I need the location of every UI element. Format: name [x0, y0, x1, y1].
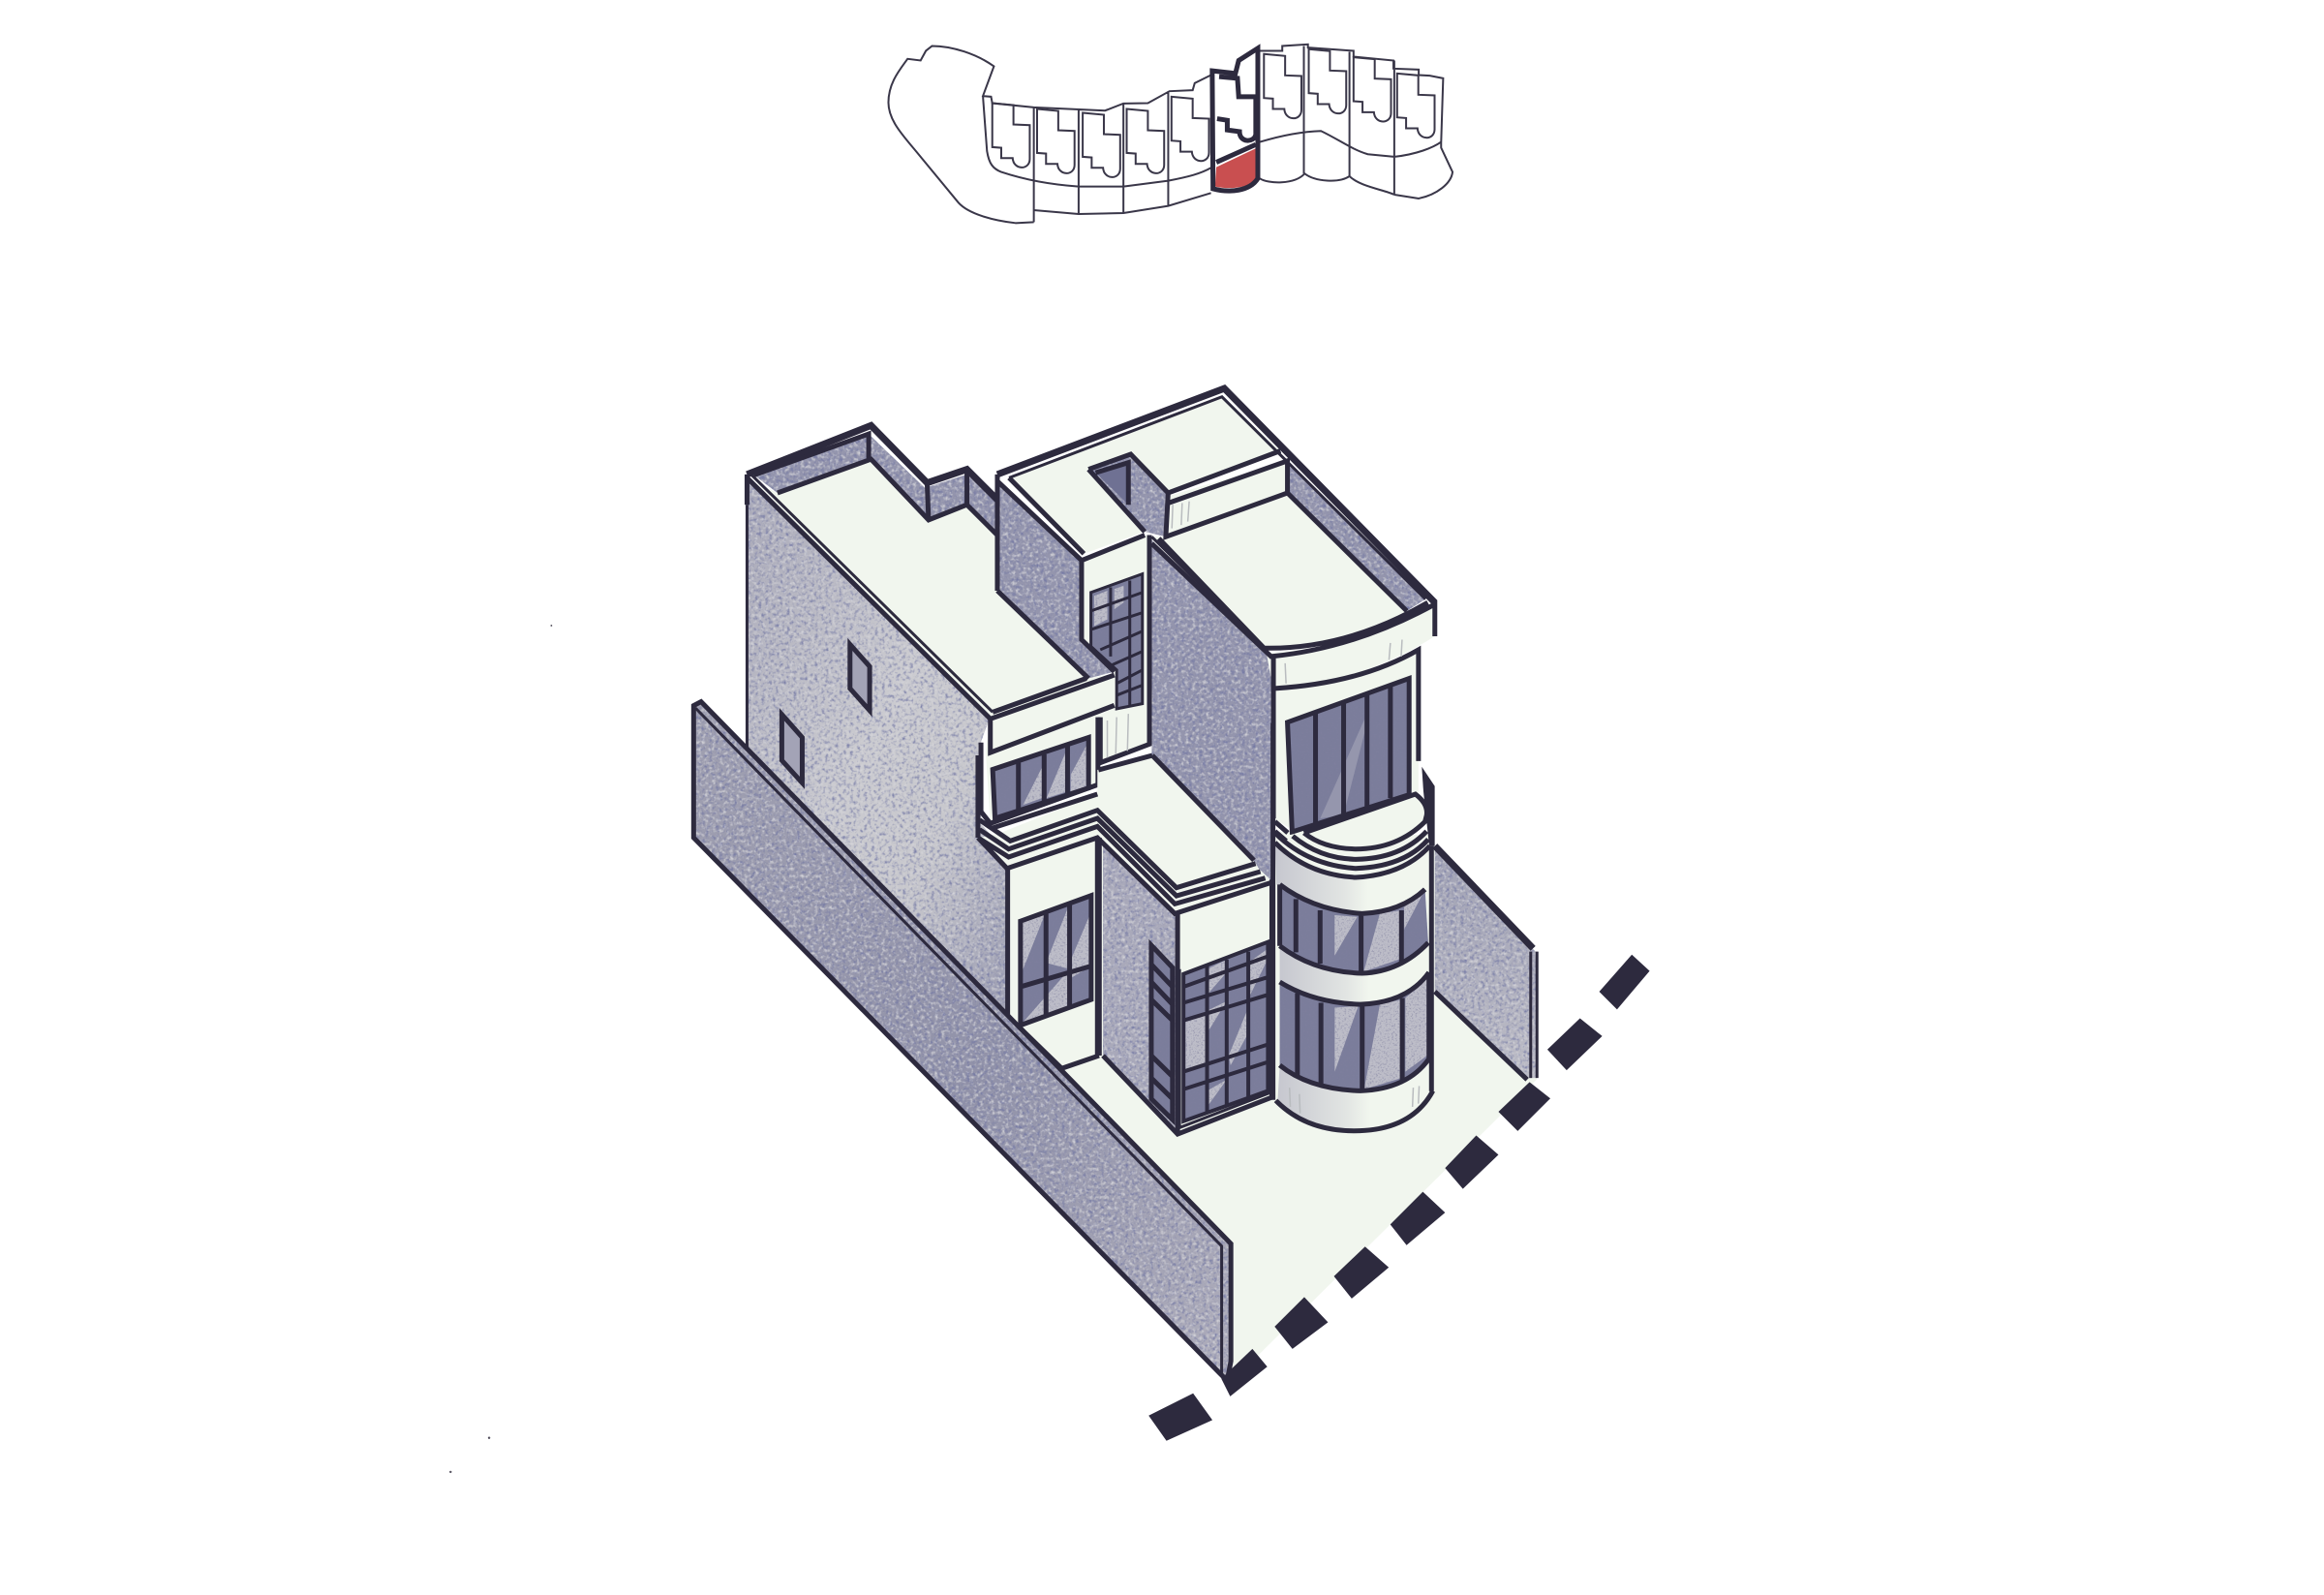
left roof terrace: [756, 459, 1115, 823]
key plan: locator map of the street: [888, 45, 1452, 223]
highlighted plot outline: [1212, 48, 1258, 191]
dark well interior: [1095, 463, 1128, 505]
tower middle band: [1280, 942, 1429, 1004]
right front mint wall: [1177, 879, 1271, 1134]
isometric house illustration: [449, 388, 1650, 1473]
stray specks: [449, 625, 552, 1473]
upper storey linework: [747, 425, 997, 500]
narrow side window: [1151, 945, 1173, 1120]
tower upper glazing: [1280, 884, 1428, 973]
lower storey: [1011, 842, 1271, 1134]
porch window: [1021, 896, 1091, 1026]
dark wedge behind bay: [1422, 767, 1435, 845]
tower upper grey band: [1275, 843, 1430, 913]
tower hatch marks: [1290, 1086, 1420, 1114]
tower lower glazing: [1280, 972, 1429, 1090]
front boundary wall: [693, 702, 1231, 1381]
grey face beside porch: [1103, 844, 1177, 1134]
key plan house footprints: [993, 49, 1435, 177]
central mint face: [1082, 536, 1149, 763]
round tower: [1276, 835, 1433, 1131]
curved roof cap band: [1267, 602, 1435, 689]
dashed street boundary: [1148, 955, 1650, 1441]
tower upper section with balcony: [1273, 723, 1435, 1100]
upper curved bay glazing: [1288, 679, 1409, 832]
small side window lower: [781, 715, 802, 782]
upper storey roofs and mint faces: [747, 388, 1435, 850]
outer window frame: [1179, 969, 1270, 1127]
main curved roof: [1151, 493, 1407, 650]
central roof: [1009, 397, 1280, 554]
balcony ring mouldings: [1275, 794, 1430, 877]
balcony slab: [1304, 794, 1426, 849]
highlighted plot front garden in red: [1215, 148, 1257, 188]
left side wall of the house: [747, 475, 1009, 1026]
small side window upper: [850, 644, 870, 711]
right boundary wall: [1435, 845, 1537, 1078]
tower edge lines: [1273, 723, 1431, 1100]
middle terrace with stepped fascia: [978, 755, 1270, 1056]
left porch mint wall: [1011, 842, 1099, 1068]
grey recessed faces in upper storey: [754, 434, 1425, 882]
left tower window band glazing: [993, 737, 1088, 818]
ground plot: [830, 830, 1537, 1386]
large gridded window: [1183, 942, 1268, 1121]
step band on roof: [1166, 461, 1288, 537]
tower base outline: [1276, 1090, 1433, 1131]
tower bottom band: [1278, 1058, 1431, 1131]
key plan outline: [888, 45, 1452, 223]
stairwell glazing grid: [1091, 574, 1143, 709]
pencil hatch marks on mint faces: [1108, 502, 1402, 850]
upper curved bay mint wall: [1273, 650, 1419, 835]
